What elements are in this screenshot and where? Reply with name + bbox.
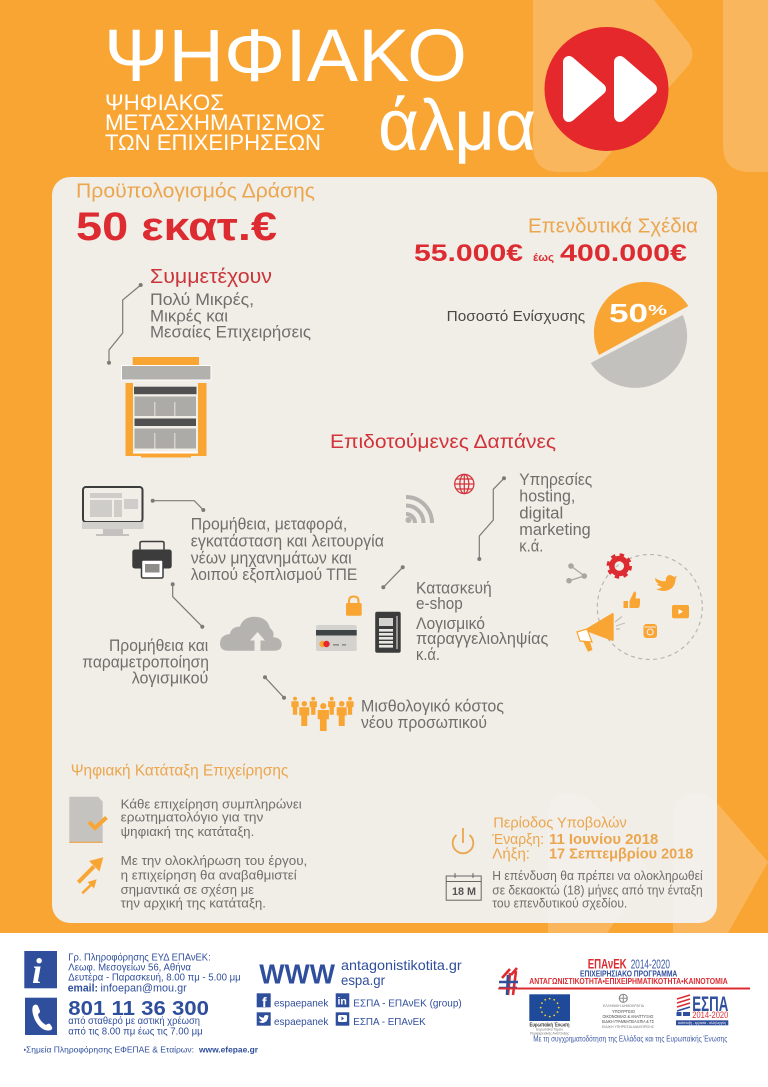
icon: cloud upload <box>220 617 282 651</box>
contact text: infoepan@mou.gr <box>100 983 187 995</box>
contact text: Γρ. Πληροφόρησης ΕΥΔ ΕΠΑνΕΚ: <box>68 952 211 964</box>
connector: services <box>477 476 506 561</box>
icon: rising arrows <box>78 857 103 893</box>
helpline: από σταθερό με αστική χρέωση <box>68 1015 200 1027</box>
contact text: email: <box>68 983 98 995</box>
logo: EPAnEK: ΕΠΑνΕΚ <box>588 956 627 971</box>
pie chart <box>591 282 688 388</box>
icon: wifi <box>406 497 432 523</box>
logo: EPAnEK <box>498 956 750 995</box>
investment plans: Επενδυτικά Σχέδια <box>528 216 698 238</box>
investment plans: 400.000€ <box>560 240 687 267</box>
text: e-shop: Κατασκευή <box>416 579 492 597</box>
text: questionnaire <box>121 796 302 839</box>
text: hardware: εγκατάσταση και λειτουργία <box>191 533 384 551</box>
text: payroll: Μισθολογικό κόστος <box>361 698 504 716</box>
contact text <box>68 952 241 995</box>
text: e-shop: e-shop <box>416 595 463 613</box>
text: questionnaire: Κάθε επιχείρηση συμπληρώνει <box>121 796 302 811</box>
social links: espaepanek <box>274 1016 329 1028</box>
logo: European Union: Ευρωπαϊκό Ταμείο <box>536 1026 564 1032</box>
logo: Hellenic Republic ministry: ΟΙΚΟΝΟΜΙΑΣ & ΑΝΑΠΤΥΞΗΣ <box>602 1014 654 1019</box>
participants: Μικρές και <box>150 308 228 326</box>
info points line: ‣ <box>23 1048 27 1055</box>
investment plans: 55.000€ <box>414 240 523 267</box>
helpline: από τις 8.00 πμ έως τις 7.00 μμ <box>68 1025 203 1037</box>
text: questionnaire: ερωτηματολόγιο για την <box>121 810 263 825</box>
icon: info: i <box>32 951 42 991</box>
logo: EPAnEK: 2014-2020 <box>631 956 670 971</box>
text: upgrade <box>121 853 307 911</box>
icon: youtube <box>336 1012 349 1026</box>
social links <box>257 993 462 1028</box>
social links: ΕΣΠΑ - ΕΠΑνΕΚ (group) <box>353 998 462 1010</box>
websites: antagonistikotita.gr <box>341 957 462 973</box>
icon: thumbs up <box>624 592 640 608</box>
logo: Hellenic Republic ministry: ΥΠΟΥΡΓΕΙΟ <box>612 1009 635 1014</box>
icon: calendar 18 months <box>446 873 481 900</box>
participants: Μεσαίες Επιχειρήσεις <box>150 324 311 342</box>
info points line: www.efepae.gr <box>198 1045 259 1055</box>
icon: facebook: f <box>262 994 267 1010</box>
logo: Hellenic Republic ministry: ΕΙΔΙΚΗ ΥΠΗΡΕΣΙΑ ΔΙΑΧΕΙΡΙΣΗΣ <box>602 1024 654 1029</box>
logo: EPAnEK: ΕΠΙΧΕΙΡΗΣΙΑΚΟ ΠΡΟΓΡΑΜΜΑ <box>580 969 677 979</box>
icon: payment terminal <box>375 612 401 653</box>
helpline: 801 11 36 300 <box>68 997 209 1020</box>
logo: ESPA: ανάπτυξη - εργασία - αλληλεγγύη <box>678 1021 726 1025</box>
text: software <box>82 637 209 687</box>
text: hardware: νέων μηχανημάτων και <box>191 549 352 567</box>
icon: building <box>122 357 211 458</box>
icon: power <box>453 828 473 853</box>
budget: 50 εκατ.€ <box>76 205 277 249</box>
aid rate pie <box>447 282 688 388</box>
participants: Συμμετέχουν <box>150 265 272 288</box>
social links: espaepanek <box>274 998 329 1010</box>
heading: leap: άλμα <box>378 86 536 166</box>
connector: e-shop <box>381 565 405 589</box>
text: hardware: Προμήθεια, μεταφορά, <box>191 515 347 533</box>
text: payroll <box>361 698 504 732</box>
submission period: 11 Ιουνίου 2018 <box>549 832 658 848</box>
icon: globe <box>455 474 474 494</box>
websites: espa.gr <box>341 972 385 988</box>
text: duration: σε δεκαοκτώ (18) μήνες από την ένταξη <box>492 883 703 897</box>
icon: staff <box>291 697 354 731</box>
text: payroll: νέου προσωπικού <box>361 714 487 732</box>
submission period: 17 Σεπτεμβρίου 2018 <box>549 846 693 862</box>
text: hardware: λοιπού εξοπλισμού ΤΠΕ <box>191 566 357 584</box>
heading: digital: ΨΗΦΙΑΚΟ <box>104 14 467 97</box>
submission period: Έναρξη: <box>491 832 544 848</box>
text: hardware <box>191 515 384 584</box>
logo: ESPA: 2014-2020 <box>692 1010 728 1021</box>
text: e-shop: κ.ά. <box>416 646 440 664</box>
connector: printer to software <box>171 582 204 629</box>
connector: payroll <box>263 675 286 700</box>
submission period: Λήξη: <box>492 846 530 862</box>
digital ranking section: Ψηφιακή Κατάταξη Επιχείρησης <box>71 763 288 780</box>
text: services <box>519 471 592 556</box>
investment plans: έως <box>533 252 554 264</box>
logo: Hellenic Republic ministry <box>602 994 654 1029</box>
submission period: Περίοδος Υποβολών <box>493 815 627 831</box>
text: upgrade: η επιχείρηση θα αναβαθμιστεί <box>121 867 297 882</box>
text: duration <box>492 869 703 910</box>
title <box>104 14 536 166</box>
icon: info <box>24 951 57 991</box>
icon: facebook <box>257 993 271 1010</box>
logo: ESPA <box>676 993 728 1025</box>
text: e-shop: Λογισμικό <box>416 615 485 633</box>
contact text: Δευτέρα - Παρασκευή, 8.00 πμ - 5.00 μμ <box>68 972 241 984</box>
footer <box>0 933 768 1087</box>
icon: credit card <box>316 625 357 651</box>
text: upgrade: την αρχική της κατάταξη. <box>121 896 266 911</box>
logo: European Union <box>529 994 570 1036</box>
icon: linkedin: in <box>338 996 347 1008</box>
icon: hash arrows <box>499 968 518 995</box>
aid rate pie: Ποσοστό Ενίσχυσης <box>447 308 585 325</box>
logo: European Union: Ευρωπαϊκή Ένωση <box>530 1022 570 1028</box>
icon: phone <box>25 998 57 1035</box>
icon: document with check <box>69 797 106 843</box>
icon: instagram <box>644 624 657 638</box>
icon: calendar 18 months: 18 Μ <box>452 886 476 898</box>
icon: printer <box>132 542 172 578</box>
main panel <box>52 177 768 933</box>
subtitle: ΨΗΦΙΑΚΟΣ <box>105 90 224 115</box>
connector: monitor to hardware text <box>151 499 205 512</box>
pie chart: % <box>648 302 667 319</box>
helpline <box>68 997 209 1037</box>
text: e-shop: παραγγελιοληψίας <box>416 630 548 648</box>
text: e-shop <box>416 579 548 664</box>
dashed social circle <box>597 554 702 660</box>
icon: padlock <box>346 596 362 616</box>
logo: ESPA: ΕΣΠΑ <box>692 993 728 1016</box>
submission period <box>446 815 703 910</box>
budget <box>76 180 315 249</box>
websites: WWW <box>259 958 336 989</box>
websites <box>259 957 462 989</box>
text: questionnaire: ψηφιακή της κατάταξη. <box>121 824 254 839</box>
heading: eligible expenses: Επιδοτούμενες Δαπάνες <box>330 431 556 453</box>
logo: EPAnEK: ΑΝΤΑΓΩΝΙΣΤΙΚΟΤΗΤΑ•ΕΠΙΧΕΙΡΗΜΑΤΙΚΟΤΗΤΑ•ΚΑΙΝΟΤΟΜΙΑ <box>529 977 728 986</box>
text: services: Υπηρεσίες <box>519 471 592 489</box>
budget: Προϋπολογισμός Δράσης <box>76 180 315 202</box>
icon: linkedin <box>336 993 349 1008</box>
text: services: hosting, <box>519 488 575 506</box>
icon: monitor <box>82 487 144 536</box>
text: duration: Η επένδυση θα πρέπει να ολοκληρωθεί <box>492 869 703 883</box>
text: duration: του επενδυτικού σχεδίου. <box>492 896 627 910</box>
logo: European Union: Περιφερειακής Ανάπτυξης <box>530 1030 569 1036</box>
text: software: παραμετροποίηση <box>82 653 209 671</box>
investment plans <box>414 216 698 267</box>
pie chart: 50 <box>609 298 648 328</box>
contact text: Λεωφ. Μεσογείων 56, Αθήνα <box>68 962 191 974</box>
icon: youtube <box>672 605 689 618</box>
info points line: Σημεία Πληροφόρησης ΕΦΕΠΑΕ & Εταίρων: <box>26 1045 194 1055</box>
subtitle <box>105 90 325 155</box>
icon: twitter <box>655 575 677 591</box>
logo: Hellenic Republic ministry: ΕΛΛΗΝΙΚΗ ΔΗΜΟΚΡΑΤΙΑ <box>603 1003 644 1008</box>
text: services: marketing <box>519 521 591 539</box>
text: upgrade: σημαντικά σε σχέση με <box>121 882 254 897</box>
participants: Πολύ Μικρές, <box>150 291 254 309</box>
icon: gear <box>608 555 630 577</box>
logo: fast forward <box>544 27 668 151</box>
text: software: λογισμικού <box>132 669 208 687</box>
subtitle: ΤΩΝ ΕΠΙΧΕΙΡΗΣΕΩΝ <box>105 130 321 155</box>
icon: megaphone <box>577 614 625 652</box>
text: software: Προμήθεια και <box>109 637 209 655</box>
logo: Hellenic Republic ministry: ΕΙΔΙΚΗ ΓΡΑΜΜΑΤΕΙΑ ΕΠΙΑ & ΤΣ <box>602 1019 654 1024</box>
icon: twitter <box>257 1012 271 1026</box>
text: services: κ.ά. <box>519 538 543 556</box>
subtitle: ΜΕΤΑΣΧΗΜΑΤΙΣΜΟΣ <box>105 110 325 135</box>
digital ranking section <box>69 763 307 911</box>
social links: ΕΣΠΑ - ΕΠΑνΕΚ <box>353 1016 426 1028</box>
text: services: digital <box>519 504 563 522</box>
participants <box>107 265 311 365</box>
icon: share <box>566 563 587 584</box>
text: upgrade: Με την ολοκλήρωση του έργου, <box>121 853 307 868</box>
connector <box>107 283 143 365</box>
